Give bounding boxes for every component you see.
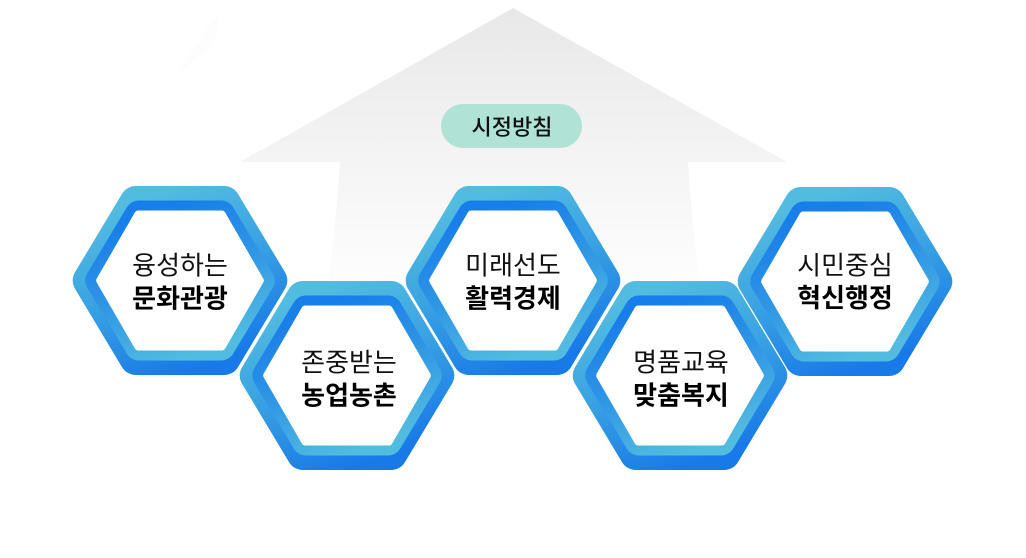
hexagon: 시민중심 혁신행정	[754, 203, 936, 360]
hexagon: 명품교육 맞춤복지	[589, 297, 771, 454]
faint background smudge	[178, 14, 218, 74]
hexagon: 미래선도 활력경제: 활력경제	[465, 284, 561, 314]
background arrow	[240, 8, 787, 310]
hexagon: 존중받는 농업농촌	[256, 297, 438, 454]
hexagon: 융성하는 문화관광: 문화관광	[132, 284, 228, 314]
hexagon: 융성하는 문화관광	[89, 202, 271, 359]
hexagon: 미래선도 활력경제	[422, 202, 604, 359]
hexagon: 시민중심 혁신행정: 시민중심	[797, 250, 893, 280]
hexagon: 시민중심 혁신행정: 혁신행정	[797, 283, 893, 313]
hexagon: 명품교육 맞춤복지: 맞춤복지	[633, 380, 729, 410]
hexagon: 명품교육 맞춤복지: 명품교육	[633, 348, 729, 378]
hexagon: 존중받는 농업농촌: 존중받는	[301, 348, 397, 378]
hexagon: 미래선도 활력경제: 미래선도	[465, 250, 561, 280]
status pill: 시정방침	[441, 104, 582, 148]
hexagon: 존중받는 농업농촌: 농업농촌	[301, 380, 397, 410]
status pill: 시정방침: 시정방침	[472, 115, 552, 140]
hexagon: 융성하는 문화관광: 융성하는	[132, 250, 228, 280]
